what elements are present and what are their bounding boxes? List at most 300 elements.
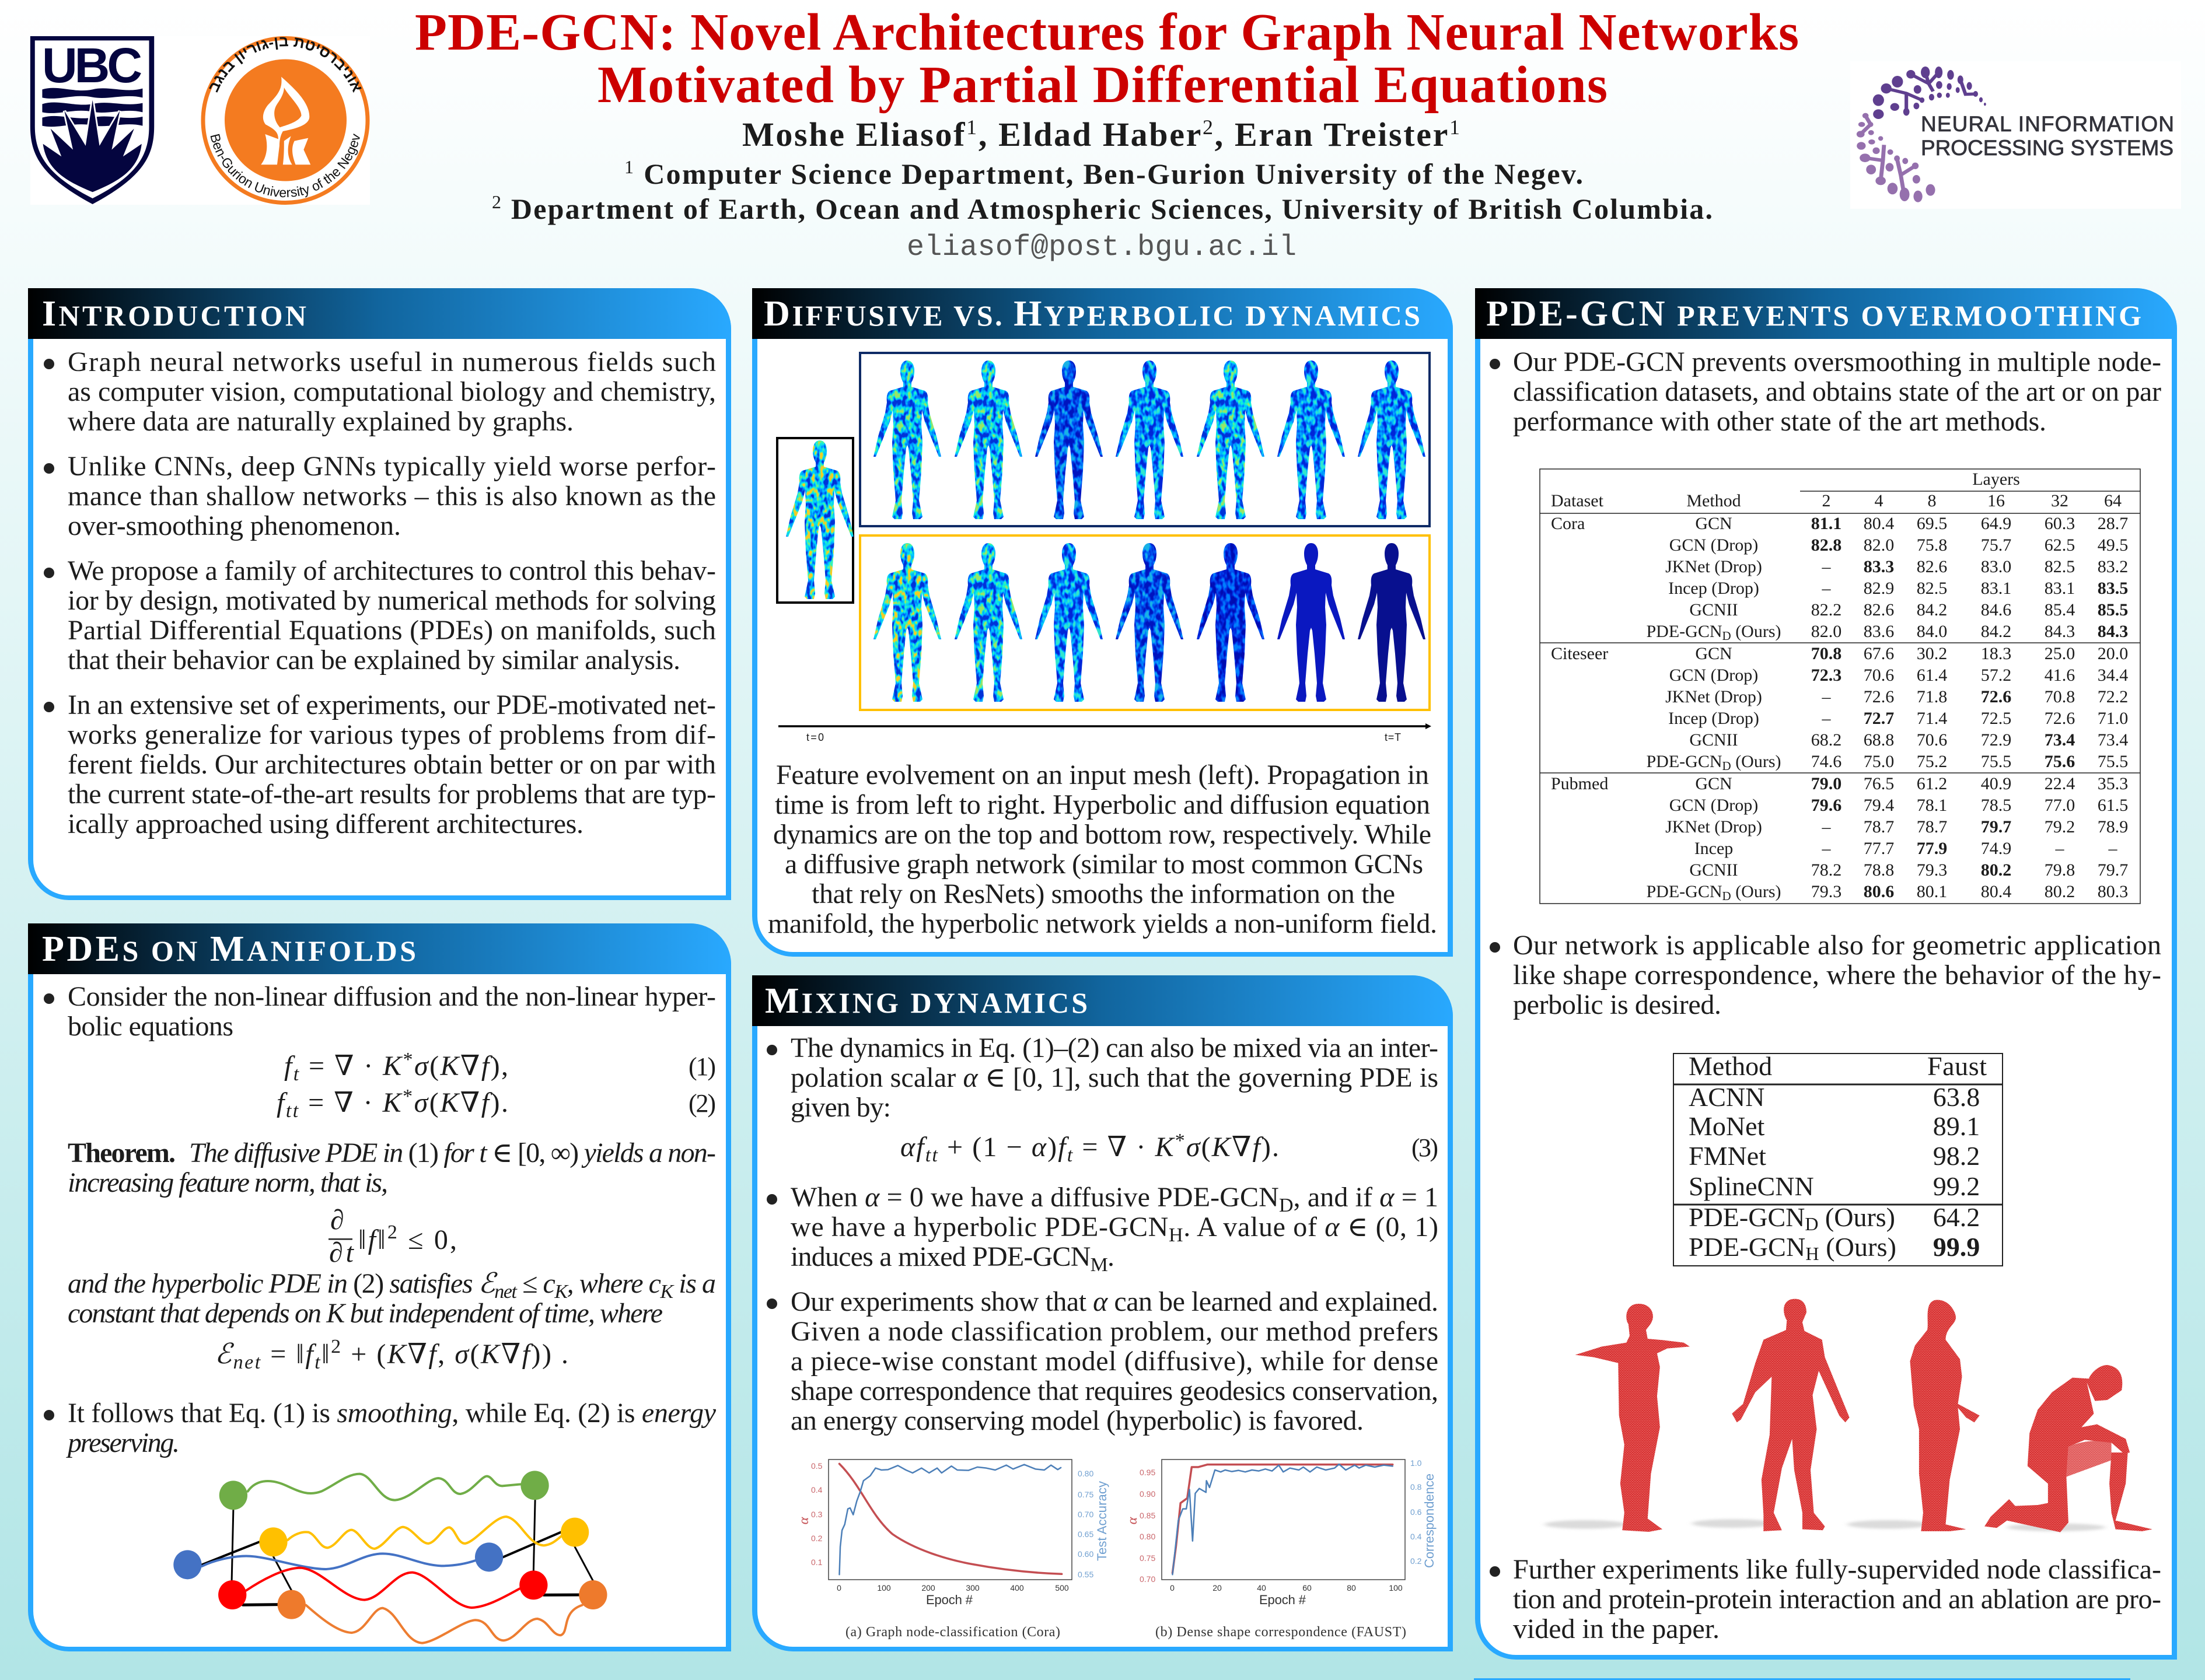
text: mixing bullet 3: a piece-wise constant model (diffusive), while for dense <box>791 1346 1438 1377</box>
equation 3: tt <box>925 1144 938 1166</box>
table: node classification results: 76.5 <box>1864 774 1894 793</box>
text: introduction bullets: over-smoothing phenomenon. <box>68 510 401 541</box>
affiliations: 2 <box>492 191 501 212</box>
table: node classification results: (Ours) <box>1731 622 1781 641</box>
table: Faust results: D <box>1805 1213 1818 1234</box>
table: node classification results: GCNII <box>1689 730 1738 750</box>
text: further experiments bullet: Further experiments like fully-supervided node classifica- <box>1513 1554 2161 1585</box>
table: node classification results: 78.9 <box>2098 817 2128 836</box>
table: node classification results: 61.2 <box>1917 774 1947 793</box>
chart: graph node classification: 0.1 <box>811 1558 823 1567</box>
text: introduction bullets: Unlike CNNs, deep GNNs typically yield worse perfor- <box>68 451 716 482</box>
equations 1 and 2: (1) <box>689 1052 716 1081</box>
equations 1 and 2: * <box>403 1049 413 1070</box>
text: theorem: ‖f‖ <box>358 1224 386 1255</box>
table: Faust results: (Ours) <box>1818 1202 1895 1232</box>
chart: dense shape correspondence: 40 <box>1257 1583 1266 1592</box>
text: theorem: + ( <box>343 1339 386 1370</box>
text: theorem: net <box>494 1281 518 1303</box>
text: introduction bullets: We propose a family of architectures to control this behav- <box>68 555 716 586</box>
table: node classification results: 79.0 <box>1811 774 1841 793</box>
text: theorem: ‖ <box>322 1339 330 1370</box>
table: node classification results: – <box>1822 687 1831 706</box>
table: node classification results: Pubmed <box>1551 774 1608 793</box>
text: mixing bullet 3: Given a node classification problem, our method prefers <box>791 1316 1438 1347</box>
table: node classification results: GCNII <box>1689 860 1738 880</box>
text: theorem: net <box>233 1352 261 1373</box>
text: figure caption: dynamics are on the top and bottom row, respectively. While <box>773 819 1431 850</box>
heading: PDE-GCN prevents overmoothing: PDE-GCN PREVENTS OVERMOOTHING <box>1486 294 2141 334</box>
table: node classification results: 75.0 <box>1864 752 1894 771</box>
equation 3 <box>900 1130 1438 1166</box>
table: node classification results: 81.1 <box>1811 514 1841 533</box>
chart: graph node classification: 0.75 <box>1078 1490 1093 1499</box>
text: mixing bullet 1 <box>767 1032 1438 1123</box>
table: node classification results: 82.8 <box>1811 536 1841 555</box>
table: node classification results: 83.1 <box>2045 579 2075 598</box>
table: node classification results: 78.7 <box>1917 817 1947 836</box>
title: Motivated by Partial Differential Equations <box>597 56 1608 114</box>
table: node classification results: PDE-GCN <box>1647 622 1722 641</box>
chart: graph node classification: 200 <box>921 1583 935 1592</box>
table: Faust results: 99.2 <box>1933 1171 1980 1201</box>
text: introduction bullets: Graph neural networks useful in numerous fields such <box>68 346 716 377</box>
affiliations: 1 <box>624 156 634 177</box>
table: node classification results: – <box>1822 817 1831 836</box>
text: geometric application bullet: perbolic is desired. <box>1513 989 1721 1020</box>
logo: NeurIPS: PROCESSING SYSTEMS <box>1921 136 2173 160</box>
table: node classification results: Method <box>1686 491 1741 510</box>
table: node classification results: JKNet (Drop) <box>1665 817 1762 836</box>
table: node classification results: 85.5 <box>2098 600 2128 620</box>
table: node classification results: 75.2 <box>1917 752 1947 771</box>
equation 3: (K∇f). <box>1201 1132 1279 1163</box>
table: node classification results: 30.2 <box>1917 644 1947 663</box>
text: theorem: K∇f, σ(K∇f)) . <box>387 1339 568 1370</box>
chart: dense shape correspondence: 0.90 <box>1140 1489 1155 1499</box>
affiliations <box>492 156 1713 225</box>
table: node classification results: 84.3 <box>2098 622 2128 641</box>
table: node classification results: (Ours) <box>1731 882 1781 901</box>
chart: dense shape correspondence: 0.80 <box>1140 1532 1155 1541</box>
text: mixing bullet 3: shape correspondence that requires geodesics conservation, <box>791 1376 1438 1406</box>
text: mixing bullet 2: . <box>1107 1241 1114 1272</box>
table: node classification results <box>1540 469 2140 904</box>
affiliations: Department of Earth, Ocean and Atmospheric Sciences, University of British Columbia. <box>502 192 1713 225</box>
text: introduction bullets: that their behavior can be explained by similar analysis. <box>68 645 680 676</box>
figure: diffusion dynamics row <box>860 536 1430 710</box>
table: node classification results: 85.4 <box>2045 600 2075 620</box>
table: node classification results: 83.5 <box>2098 579 2128 598</box>
table: node classification results: 72.6 <box>1864 687 1894 706</box>
table: Faust results: ACNN <box>1689 1082 1764 1112</box>
chart: graph node classification: 500 <box>1055 1583 1069 1592</box>
text: theorem: is a <box>673 1268 716 1299</box>
equations 1 and 2: (K∇f). <box>429 1087 508 1118</box>
title: PDE-GCN: Novel Architectures for Graph Neural Networks <box>415 4 1799 61</box>
heading: PDEs on manifolds: PDES ON MANIFOLDS <box>42 929 416 969</box>
table: node classification results: – <box>1822 839 1831 858</box>
chart: graph node classification: 0.70 <box>1078 1510 1093 1519</box>
table: node classification results: 68.2 <box>1811 730 1841 750</box>
text: mixing bullet 3 <box>767 1286 1438 1436</box>
authors: , Eldad Haber <box>979 116 1201 153</box>
text: mixing bullet 2: . A value of <box>1183 1212 1325 1242</box>
table: node classification results: 41.6 <box>2045 666 2075 685</box>
text: introduction bullets <box>44 346 716 839</box>
chart: dense shape correspondence: α <box>1125 1517 1140 1524</box>
table: node classification results: 77.7 <box>1864 839 1894 858</box>
text: theorem: increasing feature norm, that is, <box>68 1167 388 1198</box>
table: node classification results: Incep <box>1694 839 1733 858</box>
text: mixing bullet 2: we have a hyperbolic PDE-GCN <box>791 1212 1168 1242</box>
text: mixing bullet 2: α ∈ (0, 1) <box>1325 1212 1438 1242</box>
table: node classification results: 79.6 <box>1811 796 1841 815</box>
logo: Ben-Gurion University: אוניברסיטת בן-גוריון בנגב <box>209 37 362 93</box>
table: node classification results: GCN (Drop) <box>1669 666 1758 685</box>
text: figure caption: time is from left to right. Hyperbolic and diffusion equation <box>775 789 1430 820</box>
equation 3: t <box>1067 1144 1074 1166</box>
table: node classification results: GCN <box>1695 514 1732 533</box>
table: node classification results: 62.5 <box>2045 536 2075 555</box>
chart: graph node classification: 400 <box>1010 1583 1024 1592</box>
equations 1 and 2: t <box>293 1063 300 1085</box>
text: introduction bullets: ior by design, motivated by numerical methods for solving <box>68 585 716 616</box>
table: node classification results: 79.3 <box>1811 882 1841 901</box>
table: node classification results: 75.5 <box>2098 752 2128 771</box>
table: node classification results: 25.0 <box>2045 644 2075 663</box>
table: node classification results: 82.6 <box>1917 557 1947 576</box>
logo panel: UBC and Ben-Gurion logos <box>30 36 370 205</box>
chart: graph node classification: 0.60 <box>1078 1549 1093 1559</box>
panel: diffusive vs hyperbolic dynamics <box>752 288 1453 957</box>
chart: dense shape correspondence: 80 <box>1347 1583 1356 1592</box>
heading: diffusive vs hyperbolic: DIFFUSIVE VS. HYPERBOLIC DYNAMICS <box>764 294 1420 334</box>
text: figure caption: that rely on ResNets) smooths the information on the <box>812 878 1395 909</box>
chart: graph node classification: Test Accuracy <box>1095 1481 1109 1561</box>
table: node classification results: 83.2 <box>2098 557 2128 576</box>
table: node classification results: D <box>1722 629 1731 643</box>
table: node classification results: 78.8 <box>1864 860 1894 880</box>
text: introduction bullets: Partial Differential Equations (PDEs) on manifolds, such <box>68 615 716 646</box>
equation 3: K <box>1155 1132 1176 1163</box>
text: mixing bullet 1: given by: <box>791 1092 891 1123</box>
logo: UBC shield: UBC <box>42 38 142 93</box>
table: Faust results: H <box>1805 1243 1819 1264</box>
table: node classification results: 84.2 <box>1917 600 1947 620</box>
text: mixing bullet 1: The dynamics in Eq. (1)–(2) can also be mixed via an inter- <box>791 1032 1438 1063</box>
text: further experiments bullet <box>1490 1554 2161 1644</box>
table: node classification results: 61.5 <box>2098 796 2128 815</box>
table: node classification results: GCN (Drop) <box>1669 796 1758 815</box>
text: theorem: , where c <box>567 1268 661 1299</box>
table: Faust results: 63.8 <box>1933 1082 1980 1112</box>
title <box>415 4 1799 114</box>
table: node classification results: 82.2 <box>1811 600 1841 620</box>
arrow: time axis: t=T <box>1385 732 1401 743</box>
table: node classification results: 70.8 <box>2045 687 2075 706</box>
equations 1 and 2: = ∇ · <box>300 1087 381 1118</box>
text: mixing bullet 1: polation scalar α ∈ [0, 1], such that the governing PDE is <box>791 1062 1438 1093</box>
equations 1 and 2: f <box>277 1087 288 1118</box>
text: theorem: f <box>305 1339 316 1370</box>
table: node classification results: 82.0 <box>1864 536 1894 555</box>
table: node classification results: 60.3 <box>2045 514 2075 533</box>
table: node classification results: 78.1 <box>1917 796 1947 815</box>
text: oversmoothing bullet <box>1490 346 2161 437</box>
table: Faust results: PDE-GCN <box>1689 1232 1805 1262</box>
authors: , Eran Treister <box>1215 116 1448 153</box>
table: Faust results <box>1673 1051 2003 1266</box>
chart: graph node classification: 0.65 <box>1078 1530 1093 1539</box>
chart: dense shape correspondence: 0.95 <box>1140 1468 1155 1477</box>
equations 1 and 2: f <box>284 1051 295 1082</box>
table: Faust results: 89.1 <box>1933 1111 1980 1141</box>
text: smoothing bullet: preserving. <box>66 1427 180 1458</box>
text: theorem: constant that depends on K but independent of time, where <box>68 1298 663 1329</box>
text: intro to equations: bolic equations <box>68 1011 233 1042</box>
table: node classification results: 80.2 <box>1981 860 2011 880</box>
table: node classification results: 71.8 <box>1917 687 1947 706</box>
table: node classification results: 77.0 <box>2045 796 2075 815</box>
text: theorem <box>68 1138 716 1373</box>
text: smoothing bullet <box>44 1398 717 1458</box>
text: figure caption: manifold, the hyperbolic network yields a non-uniform field. <box>768 908 1437 939</box>
text: figure caption <box>768 760 1437 939</box>
equations 1 and 2: K <box>382 1087 403 1118</box>
chart: graph node classification: 0 <box>837 1583 841 1592</box>
equations 1 and 2: K <box>382 1051 403 1082</box>
table: node classification results: 72.6 <box>1981 687 2011 706</box>
chart: dense shape correspondence: 100 <box>1389 1583 1403 1592</box>
text: mixing bullet 2: H <box>1169 1224 1183 1246</box>
equation 3: * <box>1175 1130 1185 1152</box>
table: node classification results: 16 <box>1987 491 2005 510</box>
table: node classification results: 79.7 <box>1981 817 2011 836</box>
arrow: time axis <box>778 723 1431 743</box>
table: node classification results: 84.6 <box>1981 600 2011 620</box>
table: node classification results: – <box>1822 557 1831 576</box>
text: further experiments bullet: tion and protein-protein interaction and an ablation are pro- <box>1513 1584 2161 1615</box>
text: introduction bullets: ferent fields. Our architectures obtain better or on par with <box>68 749 716 780</box>
chart: dense shape correspondence: Correspondence <box>1422 1474 1437 1568</box>
chart: graph node classification: α <box>796 1517 812 1524</box>
table: node classification results: – <box>2055 839 2064 858</box>
text: introduction bullets: the current state-of-the-art results for problems that are typ- <box>68 779 716 810</box>
table: node classification results: 80.4 <box>1864 514 1894 533</box>
authors: Moshe Eliasof <box>742 116 965 153</box>
table: Faust results: Method <box>1689 1051 1772 1081</box>
table: node classification results: JKNet (Drop) <box>1665 557 1762 576</box>
arrow: time axis: t=0 <box>806 732 824 743</box>
table: node classification results: 82.6 <box>1864 600 1894 620</box>
chart: graph node classification: 0.3 <box>811 1510 823 1519</box>
table: node classification results: Incep (Drop) <box>1668 709 1759 728</box>
table: node classification results: 75.6 <box>2045 752 2075 771</box>
chart: dense shape correspondence: 0.4 <box>1410 1532 1422 1541</box>
chart: dense shape correspondence: 1.0 <box>1410 1458 1422 1468</box>
chart: dense shape correspondence: 0.8 <box>1410 1482 1422 1492</box>
table: node classification results: (Ours) <box>1731 752 1781 771</box>
chart: dense shape correspondence: 0.75 <box>1140 1553 1155 1563</box>
authors: 2 <box>1203 116 1213 139</box>
chart: graph node classification: 300 <box>966 1583 980 1592</box>
table: node classification results: 84.2 <box>1981 622 2011 641</box>
table: node classification results: 71.0 <box>2098 709 2128 728</box>
figure: hyperbolic dynamics row <box>860 353 1430 526</box>
table: node classification results: GCN (Drop) <box>1669 536 1758 555</box>
table: node classification results: 40.9 <box>1981 774 2011 793</box>
table: node classification results: Incep (Drop) <box>1668 579 1759 598</box>
table: node classification results: 28.7 <box>2098 514 2128 533</box>
table: node classification results: 79.3 <box>1917 860 1947 880</box>
table: node classification results: 34.4 <box>2098 666 2128 685</box>
table: node classification results: 35.3 <box>2098 774 2128 793</box>
table: node classification results: 74.9 <box>1981 839 2011 858</box>
table: node classification results: 75.8 <box>1917 536 1947 555</box>
logo: Ben-Gurion University: Ben-Gurion University of the Negev <box>210 133 360 197</box>
table: Faust results: (Ours) <box>1819 1232 1896 1262</box>
chart: dense shape correspondence: 60 <box>1302 1583 1312 1592</box>
text: theorem: ℰ <box>215 1339 235 1370</box>
text: mixing bullet 2: When α = 0 we have a diffusive PDE-GCN <box>791 1182 1279 1213</box>
table: node classification results: D <box>1722 759 1731 773</box>
text: theorem: and the hyperbolic PDE in (2) satisfies ℰ <box>68 1268 495 1299</box>
equations 1 and 2: = ∇ · <box>300 1051 382 1082</box>
table: Faust results: 64.2 <box>1933 1202 1980 1232</box>
chart: graph node classification: 0.80 <box>1078 1469 1093 1478</box>
table: node classification results: 83.3 <box>1864 557 1894 576</box>
table: Faust results: MoNet <box>1689 1111 1765 1141</box>
table: node classification results: 2 <box>1822 491 1831 510</box>
text: mixing bullet 3: an energy conserving model (hyperbolic) is favored. <box>791 1405 1364 1436</box>
table: node classification results: 79.2 <box>2045 817 2075 836</box>
panel: PDE-GCN prevents overmoothing <box>1475 288 2177 1660</box>
table: node classification results: Layers <box>1972 470 2020 489</box>
chart: graph node classification: 100 <box>877 1583 891 1592</box>
chart: dense shape correspondence: (b) Dense shape correspondence (FAUST) <box>1155 1625 1406 1640</box>
table: node classification results: 75.5 <box>1981 752 2011 771</box>
text: mixing bullet 2: D <box>1279 1195 1294 1216</box>
text: introduction bullets: mance than shallow networks – this is also known as the <box>68 481 716 512</box>
equations 1 and 2: (K∇f), <box>429 1051 508 1082</box>
table: node classification results: 79.8 <box>2045 860 2075 880</box>
affiliations: Computer Science Department, Ben-Gurion University of the Negev. <box>635 158 1583 190</box>
heading: introduction: INTRODUCTION <box>42 294 306 334</box>
figure: red mesh bodies <box>1544 1299 2152 1532</box>
table: node classification results: 20.0 <box>2098 644 2128 663</box>
text: figure caption: Feature evolvement on an input mesh (left). Propagation in <box>776 760 1429 790</box>
table: node classification results: – <box>1822 579 1831 598</box>
text: intro to equations: Consider the non-linear diffusion and the non-linear hyper- <box>68 981 716 1012</box>
table: node classification results: 83.6 <box>1864 622 1894 641</box>
logo: Ben-Gurion University <box>201 36 370 205</box>
table: node classification results: 70.8 <box>1811 644 1841 663</box>
heading: mixing dynamics: MIXING DYNAMICS <box>765 981 1088 1021</box>
table: node classification results: 79.7 <box>2098 860 2128 880</box>
equations 1 and 2: (2) <box>689 1089 716 1118</box>
text: theorem: The diffusive PDE in (1) for t ∈ [0, ∞) yields a non- <box>189 1138 716 1168</box>
table: node classification results: Cora <box>1551 514 1585 533</box>
figure: input mesh <box>777 438 855 603</box>
equations 1 and 2: * <box>403 1086 413 1107</box>
text: theorem: K <box>554 1281 569 1303</box>
table: node classification results: PDE-GCN <box>1647 752 1722 771</box>
text: geometric application bullet: like shape correspondence, where the behavior of the hy- <box>1513 960 2161 991</box>
text: figure caption: a diffusive graph network (similar to most common GCNs <box>785 849 1423 880</box>
equation 3: αf <box>900 1132 927 1163</box>
chart: dense shape correspondence: 0 <box>1170 1583 1175 1592</box>
table: node classification results: Citeseer <box>1551 644 1608 663</box>
table: node classification results: 80.1 <box>1917 882 1947 901</box>
table: node classification results: 4 <box>1874 491 1883 510</box>
chart: dense shape correspondence: Epoch # <box>1259 1592 1306 1607</box>
table: Faust results: Faust <box>1927 1051 1987 1081</box>
table: node classification results: 68.8 <box>1864 730 1894 750</box>
table: node classification results: 67.6 <box>1864 644 1894 663</box>
chart: dense shape correspondence: 20 <box>1212 1583 1222 1592</box>
text: theorem: 2 <box>387 1222 397 1243</box>
text: mixing bullet 2: α = 1 <box>1379 1182 1438 1213</box>
equations 1 and 2: σ <box>414 1051 429 1082</box>
equations 1 and 2 <box>277 1049 716 1122</box>
text: mixing bullet 3: Our experiments show that α can be learned and explained. <box>791 1286 1438 1317</box>
logo: UBC shield <box>30 36 154 204</box>
table: node classification results: 18.3 <box>1981 644 2011 663</box>
text: introduction bullets: In an extensive set of experiments, our PDE-motivated net- <box>68 690 716 720</box>
table: node classification results: 82.5 <box>2045 557 2075 576</box>
authors: 1 <box>1449 116 1460 139</box>
text: mixing bullet 2 <box>767 1182 1438 1276</box>
text: geometric application bullet <box>1490 930 2161 1020</box>
table: node classification results: 82.5 <box>1917 579 1947 598</box>
chart: graph node classification: 0.2 <box>811 1534 823 1543</box>
chart: graph node classification <box>796 1460 1109 1640</box>
table: Faust results: SplineCNN <box>1689 1171 1814 1201</box>
table: node classification results: 78.7 <box>1864 817 1894 836</box>
chart: dense shape correspondence: 0.2 <box>1410 1556 1422 1566</box>
table: node classification results: 64 <box>2104 491 2122 510</box>
table: node classification results: 71.4 <box>1917 709 1947 728</box>
table: node classification results: PDE-GCN <box>1647 882 1722 901</box>
table: node classification results: 72.2 <box>2098 687 2128 706</box>
text: introduction bullets: as computer vision, computational biology and chemistry, <box>68 376 716 407</box>
table: node classification results: – <box>1822 709 1831 728</box>
table: node classification results: 74.6 <box>1811 752 1841 771</box>
equations 1 and 2: tt <box>286 1100 299 1122</box>
chart: graph node classification: 0.55 <box>1078 1570 1093 1579</box>
text: theorem: ∂t <box>329 1237 355 1268</box>
table: Faust results: 98.2 <box>1933 1141 1980 1171</box>
table: node classification results: 22.4 <box>2045 774 2075 793</box>
text: intro to equations <box>44 981 716 1042</box>
table: node classification results: 73.4 <box>2045 730 2075 750</box>
text: mixing bullet 2: , and if <box>1294 1182 1379 1213</box>
chart: dense shape correspondence: 0.70 <box>1140 1574 1155 1584</box>
table: node classification results: 32 <box>2051 491 2068 510</box>
diagram: graph with wave connections <box>173 1471 607 1643</box>
table: node classification results: GCN <box>1695 644 1732 663</box>
table: node classification results: JKNet (Drop) <box>1665 687 1762 706</box>
table: Faust results: FMNet <box>1689 1141 1766 1171</box>
chart: dense shape correspondence: 0.85 <box>1140 1511 1155 1520</box>
text: theorem: t <box>314 1352 321 1373</box>
table: node classification results: GCNII <box>1689 600 1738 620</box>
text: oversmoothing bullet: classification datasets, and obtains state of the art or on par <box>1513 376 2161 407</box>
table: node classification results: 78.2 <box>1811 860 1841 880</box>
table: node classification results: 78.5 <box>1981 796 2011 815</box>
table: node classification results: 80.6 <box>1864 882 1894 901</box>
